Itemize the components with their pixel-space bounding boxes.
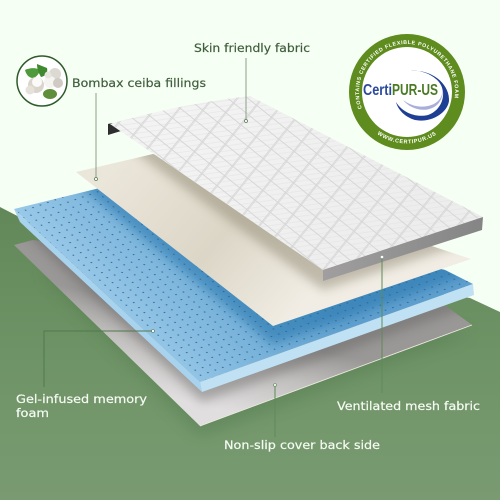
green background shape bbox=[0, 207, 500, 500]
label: gel-infused memory foam: Gel-infused memory bbox=[16, 392, 147, 406]
label: non-slip cover back side: Non-slip cover back side bbox=[224, 438, 380, 452]
label: gel-infused memory foam: foam bbox=[16, 406, 49, 420]
layer: gel-infused memory foam bbox=[14, 188, 474, 392]
icon: cotton bolls in circle bbox=[17, 56, 67, 106]
layer: quilted skin friendly fabric bbox=[108, 96, 483, 281]
badge: CertiPUR-US: CONTAINS CERTIFIED FLEXIBLE POLYURETHANE FOAM bbox=[355, 40, 459, 109]
layer: non-slip cover back side bbox=[14, 222, 474, 426]
label: bombax ceiba fillings bbox=[72, 76, 206, 180]
label: non-slip cover back side bbox=[224, 384, 380, 452]
label: bombax ceiba fillings: Bombax ceiba fillings bbox=[72, 76, 206, 90]
shadow on green background bbox=[40, 270, 472, 436]
layer: bombax ceiba fillings bbox=[76, 154, 470, 326]
badge: CertiPUR-US: WWW.CERTIPUR.US bbox=[378, 130, 436, 144]
badge: CertiPUR-US: Certi bbox=[363, 82, 392, 99]
badge: CertiPUR-US bbox=[349, 34, 465, 150]
label: gel-infused memory foam bbox=[16, 330, 154, 420]
label: skin friendly fabric bbox=[194, 41, 310, 122]
label: skin friendly fabric: Skin friendly fabric bbox=[194, 41, 310, 55]
label: ventilated mesh fabric: Ventilated mesh fabric bbox=[337, 399, 480, 413]
badge: CertiPUR-US: PUR-US bbox=[392, 82, 438, 99]
